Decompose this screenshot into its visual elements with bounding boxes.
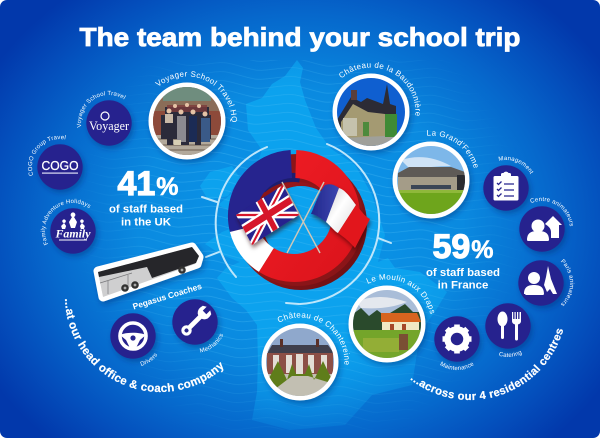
panel: France side	[260, 62, 574, 406]
outer thin ring	[202, 144, 391, 304]
label: Paris animateurs: Paris animateurs	[560, 259, 574, 306]
logo: COGO: COGO	[42, 158, 78, 173]
label: Centre animateurs: Centre animateurs	[530, 197, 573, 226]
label: Family Adventure Holidays: Family Adventure Holidays	[40, 198, 90, 246]
title: The team behind your school trip	[80, 22, 520, 52]
UK flag	[236, 185, 299, 245]
label: Chateau de la Baudonniere: Château de la Baudonnière	[339, 62, 421, 116]
label: Pegasus Coaches: Pegasus Coaches	[131, 281, 203, 311]
stat: 41% of staff based in the UK: 41%	[117, 165, 179, 203]
label: Drivers: Drivers	[140, 354, 158, 366]
icon: spoon and fork	[485, 303, 531, 349]
crossed flags	[236, 182, 370, 253]
label: La Grand'Ferme: La Grand'Ferme	[427, 130, 478, 168]
icon: wrench	[172, 299, 218, 345]
stat: 59% of staff based in France	[426, 228, 500, 292]
panel: UK side	[28, 71, 238, 392]
ring white segment	[244, 229, 266, 260]
ring depth	[246, 168, 353, 276]
logo: Family Adventure Holidays	[50, 208, 96, 254]
map of UK and France	[200, 60, 447, 430]
stat: 41% of staff based in the UK	[109, 165, 183, 228]
photo: Pegasus coach	[98, 247, 199, 297]
label: Voyager School Travel HQ: Voyager School Travel HQ	[154, 71, 238, 122]
photo: La Grand'Ferme	[392, 142, 470, 218]
logo: Family Adventure Holidays: Family	[54, 228, 91, 240]
label: Voyager School Travel: Voyager School Travel	[76, 90, 126, 128]
French flag	[311, 184, 370, 248]
icon: clipboard	[483, 165, 529, 211]
caption: at our head office and coach company: ...at our head office & coach company	[64, 299, 224, 392]
label: Catering: Catering	[499, 350, 522, 357]
icon: gear	[434, 316, 480, 362]
wave lines	[106, 60, 494, 414]
photo: Le Moulin aux Draps	[348, 286, 426, 362]
icon: person and house	[519, 206, 565, 252]
photo: Voyager School Travel HQ	[148, 82, 226, 160]
ring blue segment	[242, 164, 291, 229]
icon: steering wheel	[110, 313, 156, 359]
photo: Chateau de Chantereine	[262, 324, 338, 400]
logo: COGO	[37, 144, 83, 190]
label: Maintenance: Maintenance	[440, 362, 474, 370]
label: Mechanics: Mechanics	[200, 334, 223, 352]
stat: 41% of staff based in the UK: of staff based	[109, 204, 183, 216]
label: COGO Group Travel: COGO Group Travel	[28, 135, 66, 176]
ring red segment	[266, 164, 346, 268]
stat: 41% of staff based in the UK: in the UK	[121, 216, 172, 228]
stat: 59% of staff based in France: of staff based	[426, 267, 500, 279]
logo: Voyager School Travel: Voyager	[89, 118, 130, 133]
caption: across our 4 residential centres: ...across our 4 residential centres	[410, 328, 563, 400]
flag poles	[282, 182, 324, 253]
label: Le Moulin aux Draps: Le Moulin aux Draps	[366, 274, 434, 314]
icon: person and Eiffel tower	[518, 260, 564, 306]
photo: Chateau de la Baudonniere	[332, 74, 410, 150]
stat: 59% of staff based in France: in France	[438, 280, 488, 292]
label: Chateau de Chantereine: Château de Chantereine	[278, 312, 350, 365]
central ring chart: 41% UK, 59% France	[242, 164, 353, 276]
logo: Voyager School Travel	[86, 100, 132, 146]
label: Management: Management	[498, 156, 534, 174]
stat: 59% of staff based in France: 59%	[432, 228, 494, 266]
